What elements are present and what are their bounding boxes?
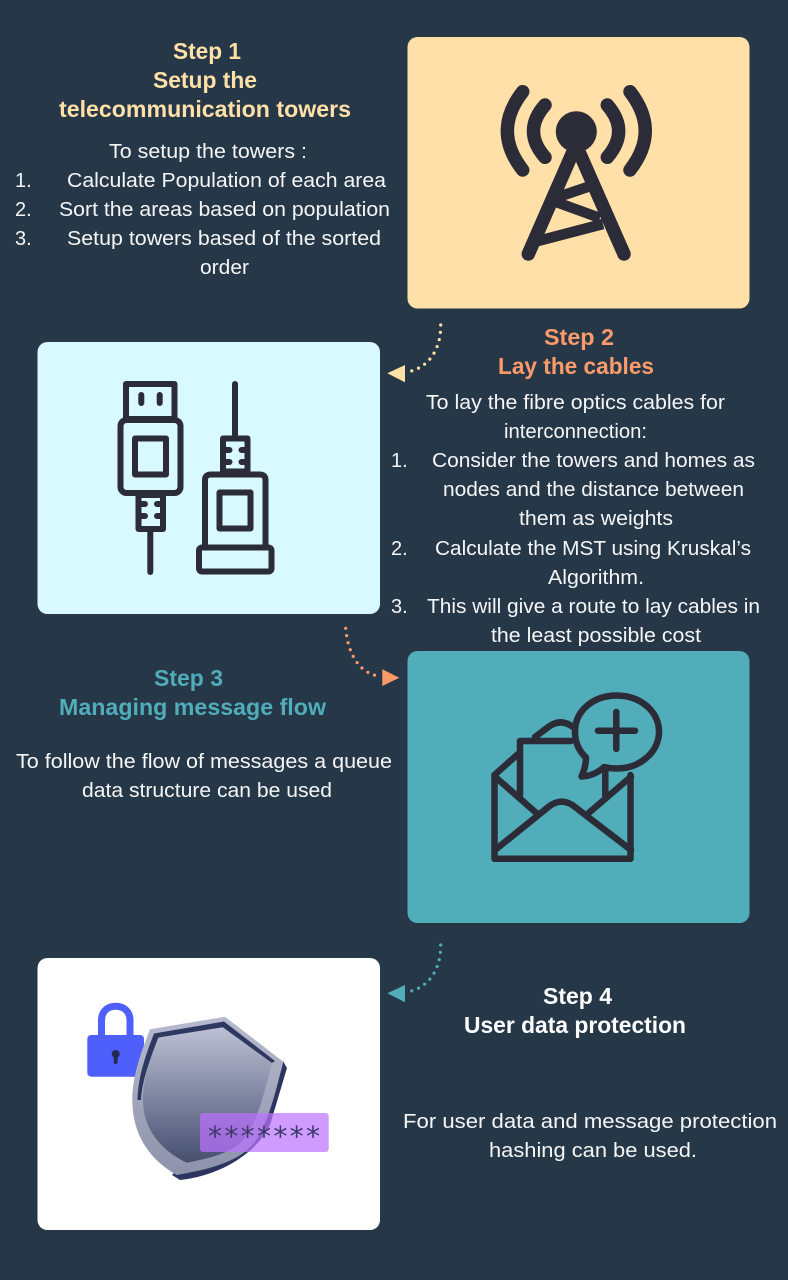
step 1 heading: telecommunication towers bbox=[59, 96, 351, 122]
step 1 text block: 3. bbox=[15, 228, 32, 250]
step 3 heading: Managing message flow bbox=[59, 694, 326, 720]
panel: cables card bbox=[38, 342, 380, 614]
step 3 text block: To follow the flow of messages a queue bbox=[16, 751, 392, 773]
step 2 heading bbox=[498, 324, 654, 379]
step 2 heading: Lay the cables bbox=[498, 353, 654, 379]
step 2 text block: Consider the towers and homes as bbox=[432, 450, 755, 472]
step 2 text block: nodes and the distance between bbox=[443, 479, 744, 501]
icon: padlock bbox=[87, 1006, 144, 1077]
panel: security card bbox=[38, 958, 380, 1230]
step 2 text block: the least possible cost bbox=[491, 625, 701, 647]
step 2 text block: Algorithm. bbox=[548, 567, 644, 589]
step 2 text block: 3. bbox=[391, 596, 408, 618]
icon: USB cables bbox=[120, 384, 272, 572]
step 2 text block: 2. bbox=[391, 538, 408, 560]
icon: shield bbox=[132, 1017, 287, 1180]
step 4 heading: Step 4 bbox=[543, 983, 612, 1009]
step 4 text block: For user data and message protection bbox=[403, 1111, 777, 1133]
step 3 heading: Step 3 bbox=[154, 665, 223, 691]
arrow: step 1 to step 2 bbox=[387, 325, 441, 382]
step 1 text block: 2. bbox=[15, 199, 32, 221]
step 2 text block: This will give a route to lay cables in bbox=[427, 596, 760, 618]
panel: message card bbox=[408, 651, 750, 923]
step 3 text block: data structure can be used bbox=[82, 780, 332, 802]
step 2 text block: To lay the fibre optics cables for bbox=[426, 392, 725, 414]
step 2 text block: 1. bbox=[391, 450, 408, 472]
step 1 heading bbox=[59, 38, 351, 122]
step 4 text block bbox=[403, 1111, 777, 1162]
step 1 text block: 1. bbox=[15, 170, 32, 192]
step 2 text block: Calculate the MST using Kruskal’s bbox=[435, 538, 751, 560]
step 1 text block: Calculate Population of each area bbox=[67, 170, 387, 192]
step 2 text block bbox=[391, 392, 760, 647]
password field: ******* bbox=[208, 1120, 320, 1153]
step 3 heading bbox=[59, 665, 326, 720]
step 1 text block bbox=[15, 141, 390, 279]
icon: envelope with speech bubble bbox=[494, 696, 659, 859]
step 3 text block bbox=[16, 751, 392, 802]
step 4 heading: User data protection bbox=[464, 1012, 686, 1038]
step 2 text block: them as weights bbox=[519, 508, 673, 530]
step 1 heading: Step 1 bbox=[173, 38, 241, 64]
step 2 heading: Step 2 bbox=[544, 324, 614, 350]
step 1 text block: order bbox=[200, 257, 249, 279]
step 4 heading bbox=[464, 983, 686, 1038]
icon: telecommunication tower bbox=[507, 92, 645, 254]
step 2 text block: interconnection: bbox=[504, 421, 647, 443]
step 1 text block: To setup the towers : bbox=[109, 141, 307, 163]
step 1 text block: Sort the areas based on population bbox=[59, 199, 390, 221]
arrow: step 3 to step 4 bbox=[387, 945, 441, 1002]
step 1 heading: Setup the bbox=[153, 67, 257, 93]
panel: tower card bbox=[408, 37, 750, 308]
step 4 text block: hashing can be used. bbox=[489, 1140, 697, 1162]
step 1 text block: Setup towers based of the sorted bbox=[67, 228, 381, 250]
arrow: step 2 to step 3 bbox=[346, 628, 399, 686]
